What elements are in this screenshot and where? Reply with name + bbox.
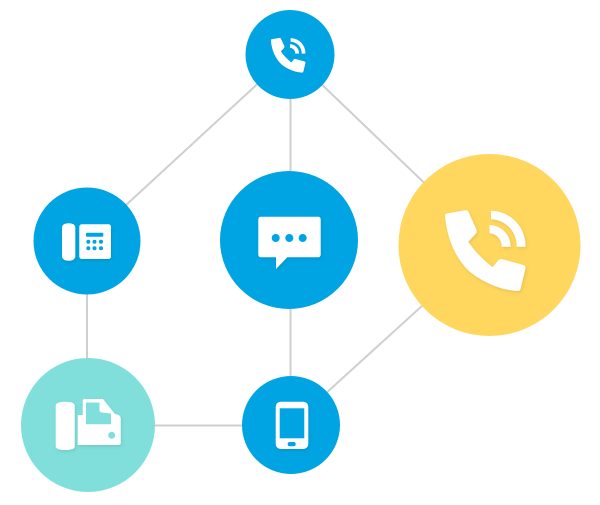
icon: speech bubble (258, 217, 321, 269)
icon: desk phone (62, 223, 111, 261)
node: fax machine (21, 358, 155, 492)
node: desk phone (34, 188, 140, 294)
icon: large phone with signal (445, 210, 526, 291)
icon: fax (56, 399, 121, 450)
icon: small phone with signal (271, 38, 306, 73)
node: mobile phone (242, 376, 340, 474)
connecting lines (87, 54, 489, 426)
node: highlighted phone call (398, 154, 580, 336)
node: top phone call (246, 10, 334, 99)
icon: smartphone (276, 402, 308, 449)
node: message (220, 171, 358, 309)
